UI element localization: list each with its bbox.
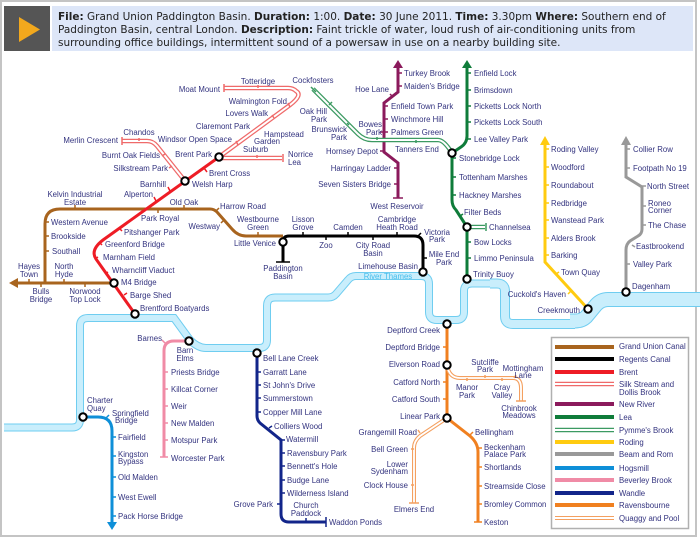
line: Quaggy and Pool: Sydenham [371,467,408,476]
River Thames [4,272,700,428]
line: Beam and Rom: Roneo [648,199,672,208]
line: Ravensbourne: Catford North [393,378,440,387]
line: Regents Canal: Mile End [429,250,459,259]
line: Grand Union Canal: Bridge [30,295,52,304]
line: New River: Winchmore Hill [391,115,444,124]
line: Grand Union Canal: Top Lock [69,295,101,304]
legend [552,338,688,528]
line: Regents Canal: Grove [292,223,314,232]
line: Quaggy and Pool: Valley [492,391,512,400]
line: Grand Union Canal: Old Oak [170,198,198,207]
line: Beverley Brook: Elms [176,354,194,363]
line: Grand Union Canal: Kelvin Industrial [47,190,103,199]
line: Lea: Tottenham Marshes [459,173,528,182]
line: Quaggy and Pool: Sutcliffe [471,358,499,367]
file description text [58,11,666,49]
line: Grand Union Canal: Westbourne [237,215,279,224]
line: Silk Stream and Dollis Brook: Lea [288,158,302,167]
line: Silk Stream and Dollis Brook: Walmington Fold [229,97,287,106]
line: Wandle [234,353,382,527]
line: Silk Stream and Dollis Brook: Silkstream Park [113,164,168,173]
line: Wandle: Ravensbury Park [287,449,347,458]
line: Wandle: Watermill [286,435,318,444]
line: New River: Palmers Green [391,128,443,137]
line: Ravensbourne: Keston [484,518,508,527]
line: Quaggy and Pool: Grangemill Road [358,428,417,437]
line: Wandle: Colliers Wood [274,422,322,431]
line: Beverley Brook: Barn [177,346,193,355]
line: Lea: Hackney Marshes [459,191,521,200]
line: Roding: Cuckold's Haven [508,290,566,299]
line: New River: Hornsey Depot [326,147,379,156]
line: Silk Stream and Dollis Brook: Lovers Walk [225,109,268,118]
line: Grand Union Canal: Westway [188,222,220,231]
line: Brent [94,150,250,314]
legend: Dollis Brook [619,388,661,397]
line: Grand Union Canal: Southall [52,247,80,256]
line: Roding: Redbridge [551,199,587,208]
line: Wandle: St John's Drive [263,381,315,390]
line: Grand Union Canal: Norwood [69,287,101,296]
line: Brent: Brent Park [175,150,212,159]
line: Grand Union Canal: Park Royal [141,214,179,223]
line: Regents Canal: Limehouse Basin [358,262,418,271]
line: Lea [452,60,542,279]
line: Beverley Brook: Barnes [137,334,162,343]
line: Grand Union Canal: Hyde [55,270,73,279]
line: New River: West Reservoir [370,202,424,211]
line: Beam and Rom: Footpath No 19 [633,164,687,173]
line: Beverley Brook: Killcat Corner [171,385,218,394]
legend: Silk Stream and [619,380,674,389]
line: Grand Union Canal: Western Avenue [51,218,108,227]
line: Silk Stream and Dollis Brook [63,77,313,181]
line: Grand Union Canal: Brookside [51,232,86,241]
line: Lea: Limmo Peninsula [474,254,534,263]
line: Beverley Brook: New Malden [171,419,214,428]
line: Brent: Greenford Bridge [105,240,165,249]
line: Regents Canal: City Road [356,241,390,250]
line: Ravensbourne: Deptford Creek [387,326,440,335]
line: Roding: Roding Valley [551,145,599,154]
line: Beverley Brook: Motspur Park [171,436,217,445]
line: Grand Union Canal: Town [20,270,38,279]
line: Roding: Barking [551,251,577,260]
line: Ravensbourne: Deptford Bridge [385,343,440,352]
line: Beam and Rom: Collier Row [633,145,673,154]
line: Quaggy and Pool: Elmers End [394,505,434,514]
line: Regents Canal: Paddington [263,264,303,273]
line: Roding: Roundabout [551,181,594,190]
line: Beverley Brook: Priests Bridge [171,368,220,377]
file description text: surrounding office buildings, intermittent sound of a powersaw in use on a nearby building site. [58,37,560,49]
line: Wandle: Summerstown [263,394,313,403]
line: Regents Canal: Zoo [319,241,333,250]
line: Quaggy and Pool: Bell Green [371,445,408,454]
legend: Lea [619,413,633,422]
line: Brent: Pitshanger Park [124,228,180,237]
line: Grand Union Canal: Estate [64,198,86,207]
line: Ravensbourne: Linear Park [400,412,440,421]
line: Pymme's Brook: Cockfosters [292,76,334,85]
line: Wandle: Budge Lane [287,476,329,485]
line: Regents Canal: Heath Road [376,223,418,232]
line: Regents Canal: Basin [273,272,293,281]
line: Grand Union Canal: Bulls [33,287,50,296]
line: Grand Union Canal: North [54,262,74,271]
line: Silk Stream and Dollis Brook: Suburb [243,145,269,154]
line: Quaggy and Pool: Lower [387,460,408,469]
line: Wandle: Paddock [291,509,321,518]
line: Roding: Alders Brook [551,234,596,243]
line: Ravensbourne: Bellingham [475,428,514,437]
line: Wandle: Bell Lane Creek [263,354,319,363]
line: Pymme's Brook: Tanners End [395,145,439,154]
line: Hogsmill: Fairfield [118,433,146,442]
line: Lea: Picketts Lock North [474,102,541,111]
line: Pymme's Brook [292,76,531,232]
line: Wandle: Grove Park [234,500,273,509]
line: Roding: Town Quay [561,268,600,277]
line: New River: Seven Sisters Bridge [318,180,391,189]
line: Lea: Filter Beds [464,208,501,217]
line: Beam and Rom: The Chase [648,221,686,230]
line: Quaggy and Pool: Mottingham [503,364,543,373]
line: New River: Maiden's Bridge [404,82,460,91]
line: Quaggy and Pool: Lane [514,371,532,380]
line: Wandle: Bennett's Hole [287,462,337,471]
line: Brent: Brentford Boatyards [140,304,209,313]
line: New River [318,60,460,211]
line: Lea: Brimsdown [474,86,513,95]
line: Ravensbourne: Elverson Road [389,360,440,369]
line: Pymme's Brook: Channelsea [489,223,531,232]
line: Regents Canal [234,215,459,281]
legend: Quaggy and Pool [619,514,680,523]
River Thames: River Thames [364,272,412,281]
line: Brent: Barge Shed [130,291,171,300]
line: Roding: Creekmouth [538,306,580,315]
line: Lea: Enfield Lock [474,69,517,78]
line: Beam and Rom: Corner [648,206,672,215]
line: Beverley Brook: Worcester Park [171,454,225,463]
header: audio file description [4,6,693,51]
line: Quaggy and Pool: Cray [494,383,510,392]
line: Quaggy and Pool [358,358,543,514]
legend: Brent [619,368,638,377]
line: New River: Hoe Lane [355,85,389,94]
line: Quaggy and Pool: Park [477,365,493,374]
line: Ravensbourne [385,324,546,527]
file description text: Paddington Basin, central London. Description: Faint trickle of water, loud rush of air-conditioning units from [58,24,635,36]
legend: Grand Union Canal [619,342,686,351]
line: Pymme's Brook: Park [311,115,327,124]
line: Brent: Alperton [124,190,153,199]
line: Ravensbourne: Shortlands [484,463,521,472]
line: Silk Stream and Dollis Brook: Garden [254,137,280,146]
line: Pymme's Brook: Brunswick [311,125,347,134]
line: Ravensbourne: Beckenham [484,443,525,452]
line: Lea: Bow Locks [474,238,512,247]
line: Silk Stream and Dollis Brook: Norrice [288,150,313,159]
line: Silk Stream and Dollis Brook: Merlin Crescent [63,136,119,145]
legend: New River [619,400,655,409]
line: Lea: Picketts Lock South [474,118,542,127]
line: Lea: Lee Valley Park [474,135,528,144]
line: Brent: M4 Bridge [121,278,157,287]
line: Lea: Stonebridge Lock [459,154,520,163]
legend: Ravensbourne [619,501,670,510]
line: Regents Canal: Park [429,235,445,244]
line: Wandle: Copper Mill Lane [263,408,322,417]
line: Hogsmill: Bypass [118,457,144,466]
line: Pymme's Brook: Bowes [359,120,382,129]
legend: Hogsmill [619,464,649,473]
line: Ravensbourne: Palace Park [484,450,526,459]
file description text: File: Grand Union Paddington Basin. Duration: 1:00. Date: 30 June 2011. Time: 3.30pm Where: Southern end of [58,11,666,23]
line: Regents Canal: Park [436,258,452,267]
line: Wandle: Garratt Lane [263,368,307,377]
line: Beverley Brook [137,334,225,463]
line: Silk Stream and Dollis Brook: Claremont Park [196,122,250,131]
line: Hogsmill: Pack Horse Bridge [118,512,183,521]
legend: Regents Canal [619,355,671,364]
interchange stations [79,149,630,422]
line: Brent: Wharncliff Viaduct [112,266,175,275]
line: Ravensbourne: Streamside Close [484,482,546,491]
line: Ravensbourne: Catford South [392,395,440,404]
legend: Roding [619,438,644,447]
line: Regents Canal: Basin [363,249,383,258]
line: Beverley Brook: Weir [171,402,187,411]
line: Hogsmill: Springfield [112,409,149,418]
line: Hogsmill [83,396,183,530]
line: Silk Stream and Dollis Brook: Windsor Open Space [158,135,232,144]
line: Hogsmill: Bridge [115,416,138,425]
line: Silk Stream and Dollis Brook: Burnt Oak Fields [102,151,160,160]
line: Regents Canal: Camden [333,223,363,232]
line: Roding: Wanstead Park [551,216,604,225]
line: Wandle: Church [293,501,319,510]
line: Grand Union Canal [9,190,283,304]
line: Silk Stream and Dollis Brook: Moat Mount [179,85,221,94]
line: Quaggy and Pool: Chinbrook [501,404,537,413]
line: Regents Canal: Cambridge [378,215,416,224]
line: New River: Enfield Town Park [391,102,453,111]
line: Silk Stream and Dollis Brook: Chandos [123,128,155,137]
line: Beam and Rom: Eastbrookend [636,242,684,251]
line: Brent: Welsh Harp [192,180,233,189]
line: Quaggy and Pool: Meadows [502,411,536,420]
line: Regents Canal: Lisson [292,215,314,224]
line: New River: Turkey Brook [404,69,450,78]
line: Beam and Rom: Valley Park [633,260,672,269]
line: Silk Stream and Dollis Brook: Totteridge [241,77,275,86]
legend: Beam and Rom [619,450,673,459]
line: Pymme's Brook: Park [331,133,347,142]
line: Quaggy and Pool: Manor [456,383,478,392]
line: Hogsmill: Quay [87,404,106,413]
line: Hogsmill: West Ewell [118,493,157,502]
line: Wandle: Wilderness Island [287,489,349,498]
line: Hogsmill: Charter [87,396,113,405]
line: Ravensbourne: Bromley Common [484,500,546,509]
line: Regents Canal: Victoria [424,228,451,237]
line: Wandle: Waddon Ponds [329,518,382,527]
line: Beam and Rom: Dagenham [632,282,670,291]
line: Quaggy and Pool: Clock House [364,481,408,490]
line: Pymme's Brook: Oak Hill [300,107,327,116]
line: Grand Union Canal: Green [247,223,269,232]
line: Roding: Woodford [551,163,585,172]
line: Silk Stream and Dollis Brook: Hampstead [264,130,304,139]
legend: Wandle [619,489,645,498]
line: New River: Harringay Ladder [331,164,391,173]
play button [4,6,50,51]
line: Beam and Rom: North Street [647,182,690,191]
line: Brent: Barnhill [140,180,166,189]
line: Grand Union Canal: Harrow Road [220,202,266,211]
legend: Beverley Brook [619,476,672,485]
line: Brent: Brent Cross [209,169,250,178]
line: Pymme's Brook: Park [366,128,382,137]
line: Quaggy and Pool: Park [459,391,475,400]
line: Hogsmill: Old Malden [118,473,158,482]
line: Regents Canal: Little Venice [234,239,276,248]
line: Beam and Rom [621,136,690,292]
legend: Pymme's Brook [619,426,673,435]
line: Hogsmill: Kingston [118,450,148,459]
line: Roding [508,136,604,315]
line: Lea: Trinity Buoy [473,270,514,279]
line: Grand Union Canal: Hayes [18,262,40,271]
line: Brent: Marnham Field [103,253,155,262]
